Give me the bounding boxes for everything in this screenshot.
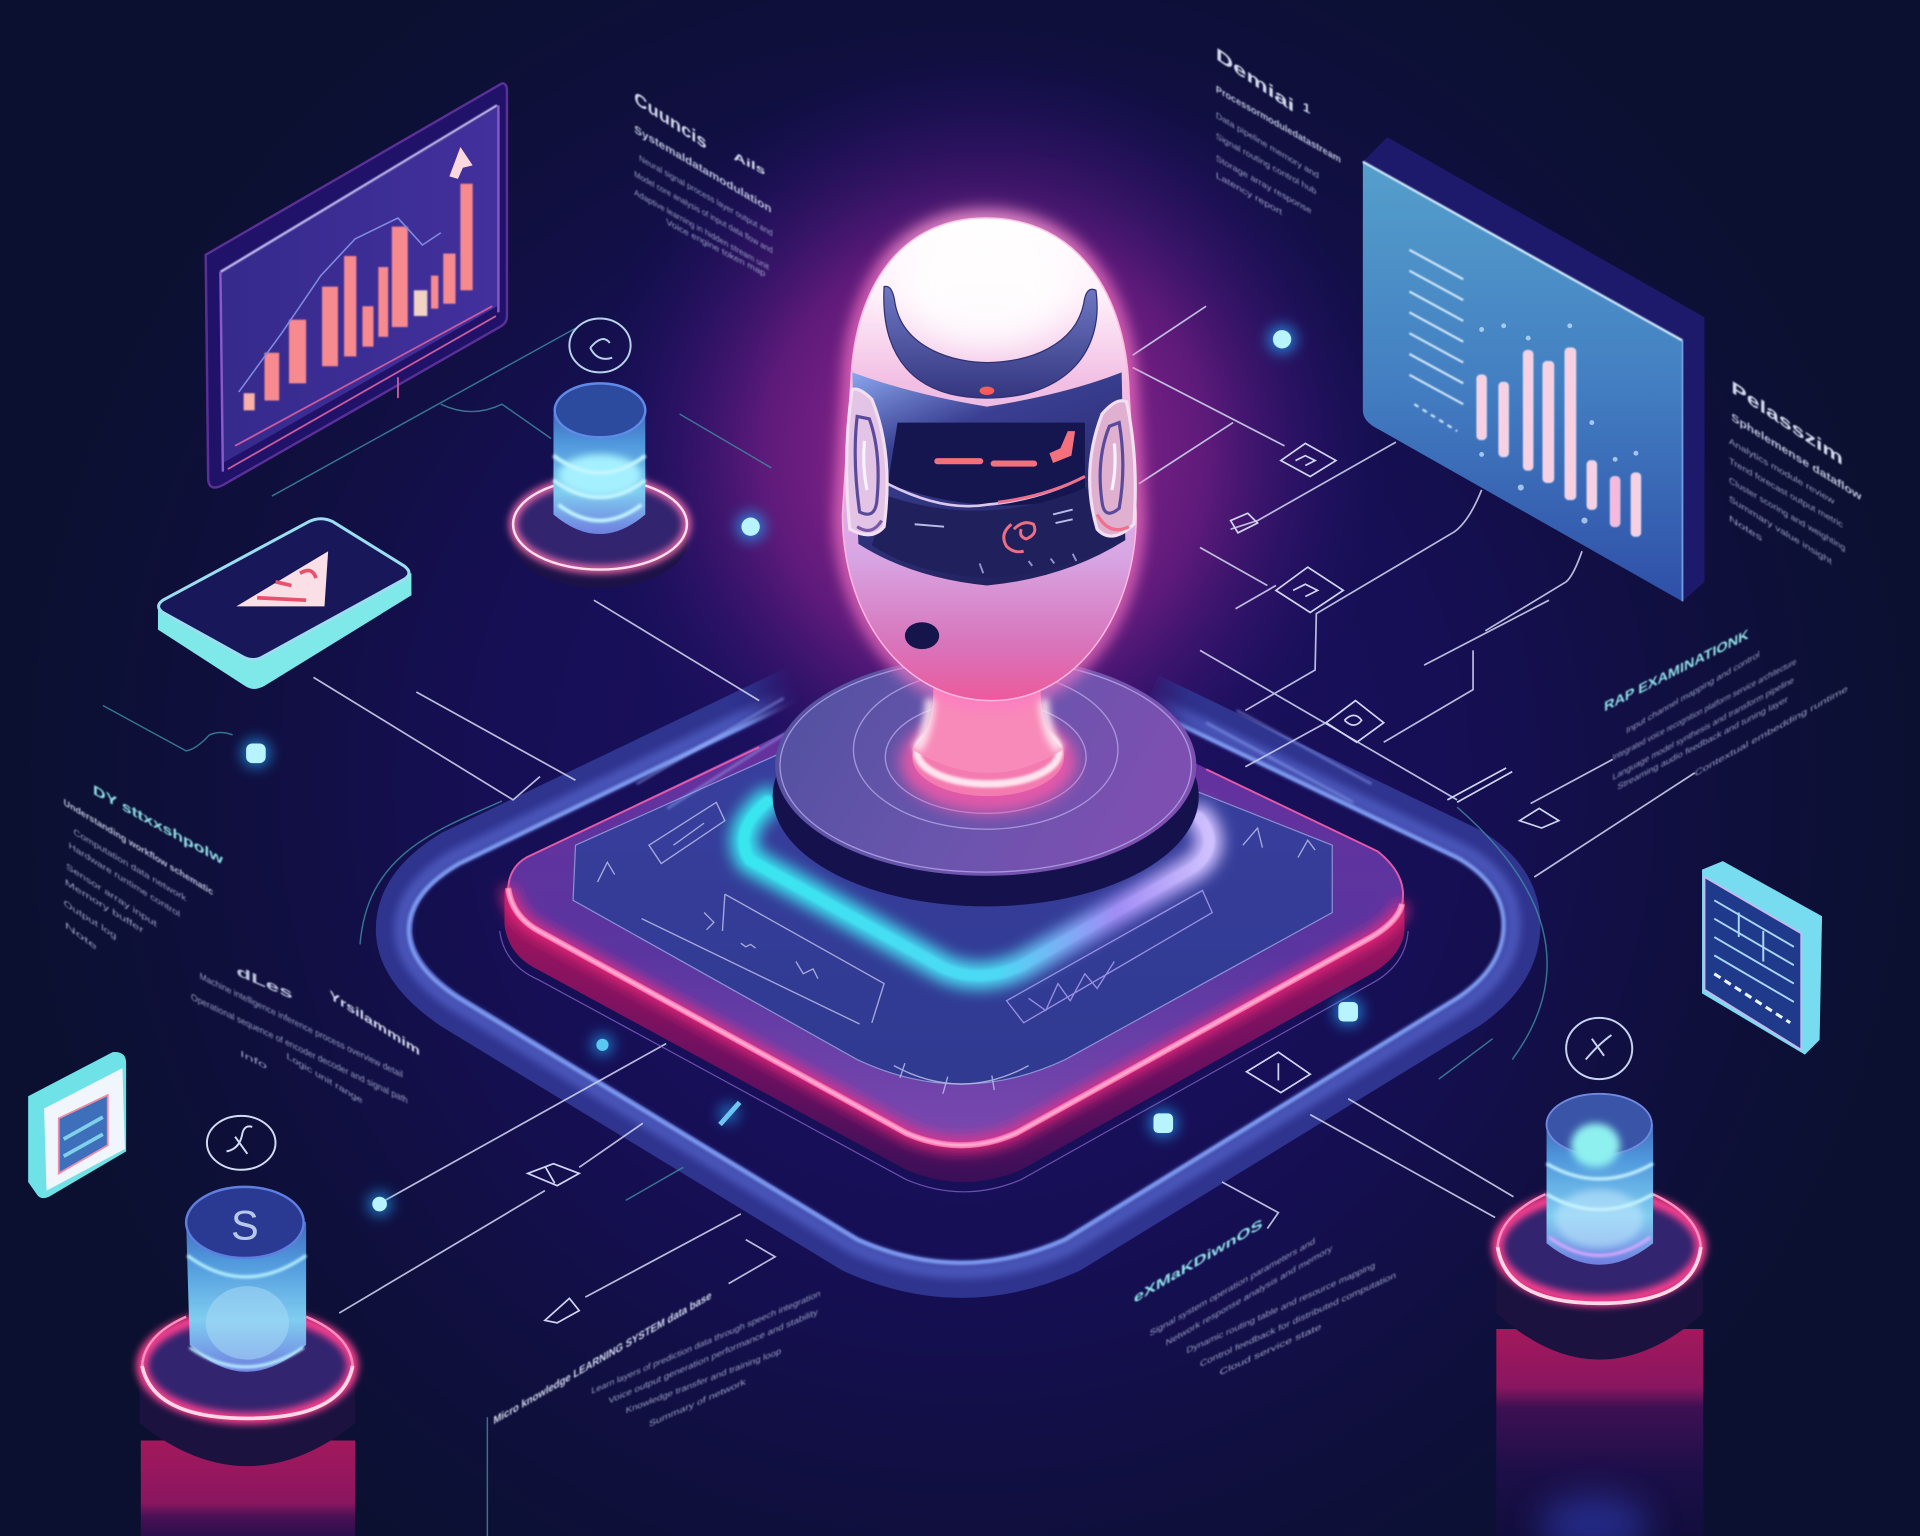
diamond connector icons — [528, 443, 1559, 1323]
text block: upper centre right: Storage array response — [1216, 153, 1311, 216]
platform lower outline — [500, 931, 1408, 1192]
text block: bottom centre right: Signal system operation parameters and — [1150, 1236, 1315, 1338]
left warning card — [158, 519, 411, 689]
screen chart dots — [1479, 323, 1638, 524]
robot head — [842, 218, 1136, 701]
platform circuit glyphs — [598, 802, 1315, 1094]
text block: left: DY sttxxshpolw — [93, 783, 224, 869]
small card body — [28, 1052, 126, 1198]
base dark body — [1496, 1249, 1703, 1360]
connector lines — [313, 306, 1695, 1313]
ring core — [142, 1366, 353, 1418]
card top face — [159, 519, 409, 660]
crescent visor — [884, 286, 1097, 398]
glass light streaks on ring — [637, 698, 1371, 808]
pink line segment — [998, 476, 1085, 502]
head shell — [842, 218, 1136, 701]
red indicator bars — [934, 431, 1075, 467]
circle icon — [569, 318, 631, 372]
text block: upper left: Model core analysis of input data flow and — [634, 169, 773, 255]
text block: right middle: Streaming audio feedback and tuning layer — [1618, 694, 1788, 792]
text block: bottom centre left: Voice output generation performance and stability — [609, 1306, 819, 1406]
text block: right: Summary value insight — [1729, 494, 1832, 567]
base pink plate — [912, 718, 1064, 796]
can body — [186, 1199, 306, 1372]
text block: bottom centre left: Micro knowledge LEARNING SYSTEM data base — [493, 1288, 712, 1427]
text block: right middle: Integrated voice recognition platform service architecture — [1613, 656, 1796, 763]
can lid — [1547, 1094, 1652, 1155]
head band — [852, 372, 1125, 585]
red status dot — [980, 386, 994, 395]
screen depth — [1363, 137, 1704, 601]
left ear swirl — [847, 389, 887, 535]
red swirl glyph — [1004, 523, 1035, 552]
screen list lines — [1409, 250, 1463, 431]
left chart dashboard — [206, 83, 507, 488]
text block: lower left: Yrsilammim — [329, 987, 420, 1059]
text block: bottom centre left: Summary of network — [649, 1376, 746, 1429]
disc top face — [775, 655, 1196, 876]
platform side — [504, 890, 1404, 1182]
head halo glow — [582, 49, 1390, 857]
text block: right middle: Input channel mapping and control — [1626, 649, 1760, 736]
head crown highlight — [900, 227, 1071, 349]
dashboard screen — [220, 108, 497, 463]
text block: left: Understanding workflow schematic — [64, 797, 213, 898]
can pale lower glow — [1555, 1189, 1643, 1248]
text block: right: Trend forecast output metric — [1729, 456, 1843, 530]
text block: bottom centre left — [493, 1288, 820, 1429]
outer neon ring track — [394, 683, 1522, 1279]
ring core — [1498, 1247, 1701, 1303]
can lid — [186, 1187, 304, 1258]
reflection blue glow — [1539, 1494, 1649, 1536]
triangle marks — [257, 570, 316, 600]
text block: right — [1729, 377, 1862, 567]
text block: upper centre right — [1216, 44, 1341, 217]
disc rings — [780, 659, 1191, 872]
ring back — [1498, 1194, 1701, 1247]
ring thin back — [142, 1317, 353, 1366]
reflection — [141, 1440, 355, 1536]
top left can with circle icon — [512, 318, 688, 588]
can base shadow — [512, 490, 688, 588]
disc shadow side — [773, 686, 1199, 906]
cyan node dots — [242, 326, 1362, 1215]
text block: bottom centre right: Control feedback for distributed computation — [1200, 1270, 1396, 1369]
text block: bottom centre left: Knowledge transfer and training loop — [626, 1346, 781, 1415]
text block: right: Sphelemense dataflow — [1731, 410, 1862, 504]
text block: lower left: dLes — [236, 963, 293, 1002]
text block: bottom centre left: Learn layers of prediction data through speech integration — [591, 1288, 820, 1396]
text block: upper centre right: Data pipeline memory and — [1216, 110, 1319, 181]
text block: right middle — [1604, 627, 1848, 792]
text block: left: Sensor array input — [66, 860, 157, 929]
left small card — [28, 1052, 126, 1198]
bottom left can — [140, 1116, 355, 1536]
can body — [1547, 1101, 1653, 1265]
band highlight line — [888, 476, 1085, 506]
small card pane lines — [64, 1117, 103, 1156]
text block: upper centre right: Processormoduledatastream — [1216, 84, 1341, 166]
card glyph lines — [1714, 900, 1794, 1023]
circle icon — [1566, 1018, 1632, 1079]
text block: upper left: Cuuncis — [634, 87, 707, 153]
lid glyph: S — [231, 1202, 259, 1249]
text block: upper centre right: Signal routing control hub — [1216, 131, 1316, 197]
dot glows — [242, 326, 1362, 1215]
text block: upper left: Voice engine token map — [666, 217, 765, 279]
text block: upper left: Adaptive learning in hidden stream unit — [634, 187, 769, 272]
can bright rings — [553, 456, 645, 521]
card side — [158, 573, 411, 689]
platform inset panel — [573, 686, 1332, 1084]
right small card — [1702, 861, 1822, 1055]
platform top face — [508, 663, 1403, 1145]
screen top highlight — [1363, 162, 1682, 341]
can base plate — [512, 478, 688, 571]
band small marks — [915, 510, 1073, 527]
can top — [555, 383, 645, 437]
pink glow ring — [142, 1313, 353, 1418]
text block: lower left: Info — [240, 1048, 267, 1071]
card face — [1704, 877, 1801, 1050]
text block: left — [64, 783, 224, 953]
text block: lower left: Operational sequence of encoder decoder and signal path — [191, 992, 408, 1106]
text block: right middle: Contextual embedding runtime — [1695, 683, 1848, 778]
screen bar chart — [1477, 348, 1641, 536]
text block: left: Computation data network — [73, 827, 186, 904]
band dark panel — [888, 423, 1085, 505]
text block: upper centre right: Latency report — [1216, 170, 1283, 217]
small card pane — [59, 1095, 108, 1173]
base plate — [141, 1312, 354, 1420]
text block: lower left: Machine intelligence inference process overview detail — [200, 971, 403, 1081]
screen face — [1363, 162, 1682, 601]
text block: bottom centre right: Network response analysis and memory — [1166, 1243, 1333, 1348]
neck — [912, 680, 1063, 773]
text block: right: Cluster scoring and weighting — [1729, 475, 1845, 553]
text block: right: Notes — [1729, 513, 1762, 543]
can base ring core — [513, 479, 687, 570]
text block: upper centre right: Demiai — [1216, 44, 1294, 117]
small card face — [44, 1068, 125, 1191]
can core glow — [558, 454, 642, 496]
text block: upper left: Ails — [733, 150, 766, 178]
dashboard frame — [206, 83, 507, 488]
base plate — [1496, 1193, 1702, 1301]
dashboard screen border — [220, 105, 497, 272]
can swirl orb — [206, 1286, 289, 1360]
right ear swirl — [1090, 401, 1135, 536]
text block: right middle: RAP EXAMINATIONK — [1604, 627, 1749, 715]
text block: left: Memory buffer — [65, 877, 143, 935]
text block: bottom centre right: Cloud service state — [1220, 1321, 1321, 1377]
can base neon ring — [513, 479, 687, 570]
head glow — [842, 218, 1136, 701]
text block: left: Hardware runtime control — [69, 840, 180, 919]
base white ring — [917, 720, 1059, 784]
band lower dots — [980, 554, 1076, 573]
pedestal disc — [773, 655, 1199, 906]
head neck and glowing base — [900, 680, 1076, 813]
neck highlight — [916, 698, 1060, 750]
text block: upper left — [634, 87, 773, 279]
text block: bottom centre right: Dynamic routing table and resource mapping — [1187, 1260, 1375, 1355]
text block: upper left: Systemaldatamodulation — [634, 122, 771, 216]
dashboard side border — [220, 105, 498, 472]
right chart screen — [1363, 137, 1704, 601]
text block: left: Note — [65, 920, 97, 953]
can body — [553, 394, 645, 534]
text block: upper left: Neural signal process layer output and — [639, 153, 773, 238]
dot cores — [246, 330, 1358, 1211]
text block: bottom centre right: eXMaKDiwnOS — [1134, 1216, 1263, 1307]
can rings — [187, 1256, 306, 1367]
teal thin wires — [103, 328, 1547, 1536]
bottom right can — [1496, 1018, 1703, 1536]
can rings — [1547, 1164, 1653, 1256]
card body — [1702, 861, 1822, 1055]
cyan glow channel — [744, 801, 1209, 976]
circle icon — [207, 1116, 276, 1170]
text block: left: Output log — [64, 897, 116, 941]
text block: right: Analytics module review — [1729, 436, 1835, 507]
can core glow — [1571, 1123, 1620, 1167]
text block: lower left: Logic unit range — [287, 1051, 362, 1106]
base glow — [900, 710, 1076, 813]
text block: bottom centre right — [1134, 1216, 1396, 1377]
reflection — [1496, 1329, 1703, 1536]
warning triangle — [236, 551, 328, 606]
head port hole — [905, 622, 939, 649]
band lower panel — [872, 488, 1122, 578]
trend arrow — [449, 147, 473, 179]
bar chart — [244, 184, 473, 410]
dashboard lower strip — [228, 306, 496, 469]
text block: right: Pelasszim — [1731, 377, 1843, 470]
text block: upper centre right: 1 — [1303, 99, 1310, 117]
text block: right middle: Language model synthesis and transform pipeline — [1613, 675, 1794, 782]
base dark body — [140, 1369, 355, 1466]
pink glow ring — [1498, 1193, 1701, 1301]
trend line — [239, 218, 441, 392]
platform base — [500, 663, 1408, 1192]
screen right edge — [1681, 341, 1683, 601]
platform pink neon edge — [508, 747, 1403, 1145]
